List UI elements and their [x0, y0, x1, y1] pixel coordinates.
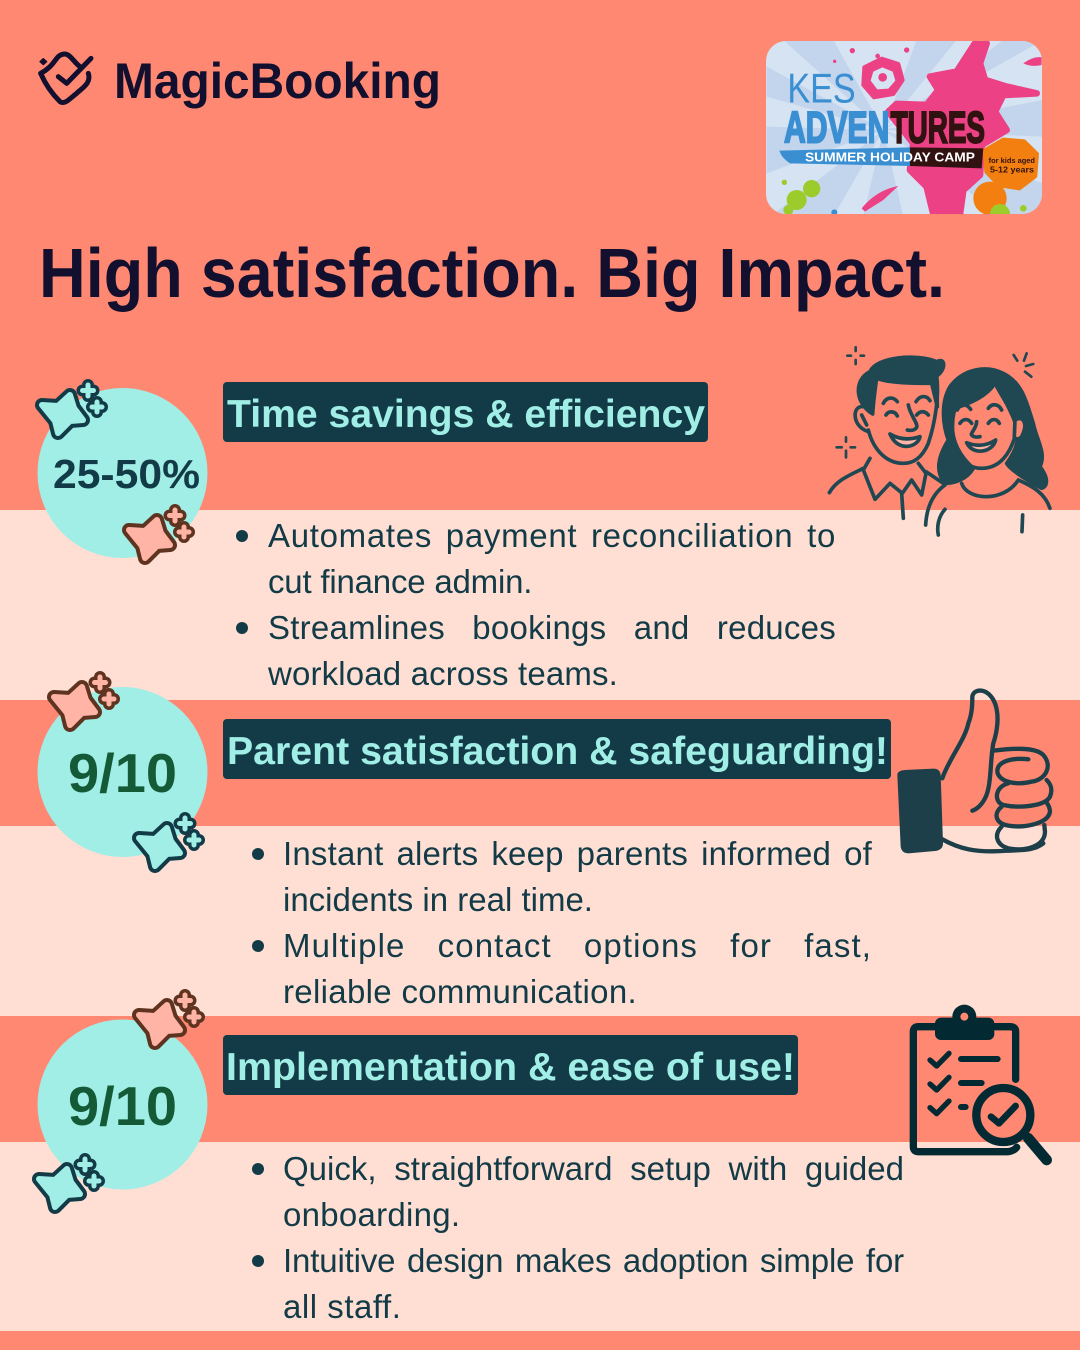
orange blobs [985, 140, 1037, 188]
icon: teal star 1 [42, 385, 102, 433]
icon: teal star 6 [39, 1159, 99, 1207]
bullets: parent satisfaction: Instant alerts keep parents informed of [283, 835, 872, 872]
bullets: implementation [252, 1150, 904, 1325]
brush bar [779, 147, 910, 166]
sunburst rays [767, 40, 1043, 217]
icon: coral star 3 [54, 677, 114, 725]
icon: coral star 2 [129, 510, 189, 558]
bullets: parent satisfaction: incidents in real time. [283, 881, 593, 918]
bullets: implementation: all staff. [283, 1288, 401, 1325]
badge text: KES [787, 64, 856, 111]
flower [863, 59, 903, 97]
pink splat [888, 43, 1037, 214]
stat circle: 9/10 implementation [38, 1020, 208, 1190]
KES Adventures badge [766, 40, 1043, 224]
bullets: implementation: Intuitive design makes adoption simple for [283, 1242, 904, 1279]
KES Adventures badge: 5-12 years [990, 164, 1034, 174]
logo wordmark: MagicBooking [114, 53, 441, 109]
heading: parent satisfaction: Parent satisfaction & safeguarding! [227, 730, 888, 773]
KES Adventures badge: SUMMER HOLIDAY CAMP [805, 150, 975, 165]
KES Adventures badge: TURES [891, 104, 985, 153]
bullets: time savings: workload across teams. [268, 655, 618, 692]
icon: coral star 5 [139, 995, 199, 1043]
heading: time savings: Time savings & efficiency [227, 393, 705, 436]
title: High satisfaction. Big Impact. [39, 234, 945, 312]
heading: implementation: Implementation & ease of use! [226, 1046, 795, 1089]
bullets: time savings: cut finance admin. [268, 563, 532, 600]
bullets: parent satisfaction: reliable communication. [283, 973, 637, 1010]
KES Adventures badge: for kids aged [989, 158, 1035, 165]
icon: clipboard with magnifier [913, 1005, 1047, 1160]
icon: logo mark [40, 54, 91, 103]
icon: happy couple [829, 347, 1050, 535]
bullets: time savings [236, 517, 836, 692]
bullets: time savings: Streamlines bookings and reduces [268, 609, 836, 646]
stat circle: 9/10 parents: 9/10 [68, 742, 177, 804]
bullets: implementation: onboarding. [283, 1196, 460, 1233]
green blobs [782, 180, 1027, 214]
bullets: parent satisfaction [252, 835, 872, 1010]
stat circle: 25-50% [38, 388, 208, 558]
light band 1 [0, 510, 1080, 700]
stat circle: 9/10 parents [38, 687, 208, 857]
bullets: implementation: Quick, straightforward setup with guided [283, 1150, 904, 1187]
stat circle: 25-50%: 25-50% [53, 451, 200, 497]
MagicBooking logo [40, 53, 441, 109]
KES Adventures badge: ADVEN [784, 104, 889, 153]
icon: thumbs up [897, 691, 1051, 853]
stat circle: 9/10 implementation: 9/10 [68, 1075, 177, 1137]
light band 2 [0, 826, 1080, 1016]
icon: teal star 4 [139, 818, 199, 866]
light band 3 [0, 1142, 1080, 1331]
bullets: parent satisfaction: Multiple contact options for fast, [283, 927, 872, 964]
bullets: time savings: Automates payment reconciliation to [268, 517, 836, 554]
